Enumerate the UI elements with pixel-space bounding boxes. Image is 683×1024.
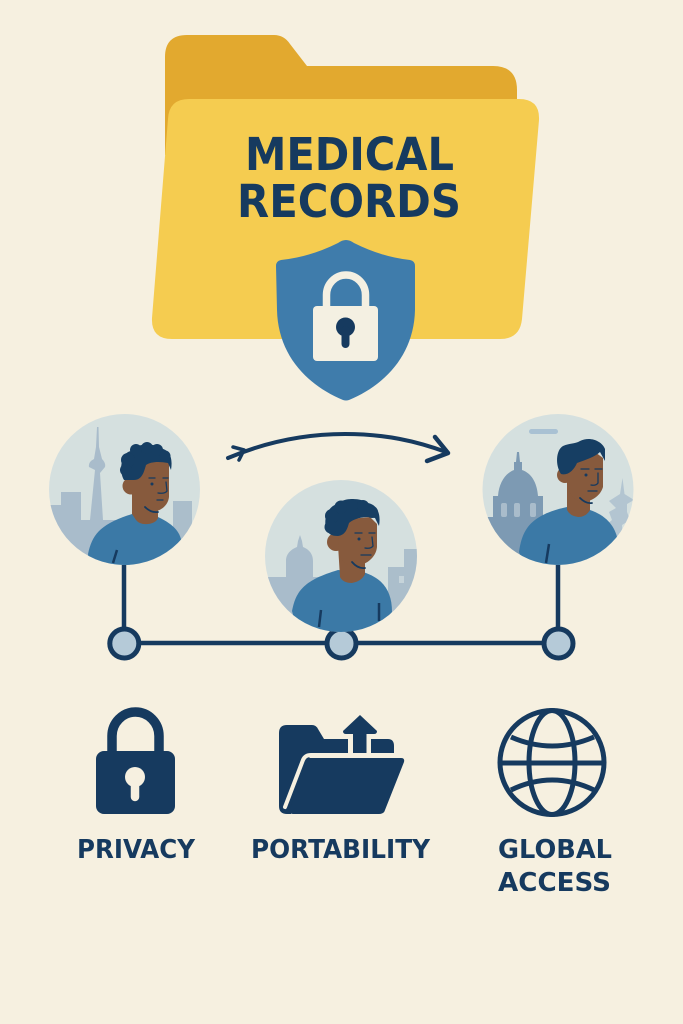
folder with title and shield <box>152 35 539 400</box>
node 2 <box>327 629 356 658</box>
shield with lock <box>276 240 415 400</box>
portrait 2 <box>260 480 418 640</box>
label: portability: PORTABILITY <box>251 835 431 865</box>
cloud <box>529 429 558 434</box>
curved arrow <box>228 434 448 461</box>
title: MEDICAL <box>245 128 454 181</box>
icon: globe <box>500 710 604 814</box>
title <box>237 128 461 228</box>
label: global access <box>498 835 612 898</box>
label: global access: ACCESS <box>498 868 611 898</box>
skyline with dome <box>268 536 329 631</box>
label: privacy: PRIVACY <box>77 835 196 865</box>
label: global access: GLOBAL <box>498 835 612 865</box>
node 1 <box>110 629 139 658</box>
icon: folder with upload arrow <box>279 715 404 814</box>
folder front <box>152 99 539 339</box>
dome building <box>488 452 543 561</box>
portrait 3 <box>480 414 634 575</box>
person <box>88 442 182 570</box>
portrait 1 <box>40 414 201 570</box>
title: RECORDS <box>237 175 461 228</box>
person <box>292 499 392 640</box>
person <box>519 439 617 570</box>
pagoda <box>600 478 633 552</box>
connector timeline <box>110 560 573 658</box>
skyline with tower <box>50 427 130 565</box>
node 3 <box>544 629 573 658</box>
icon: padlock <box>96 712 175 814</box>
folder back <box>165 35 517 155</box>
